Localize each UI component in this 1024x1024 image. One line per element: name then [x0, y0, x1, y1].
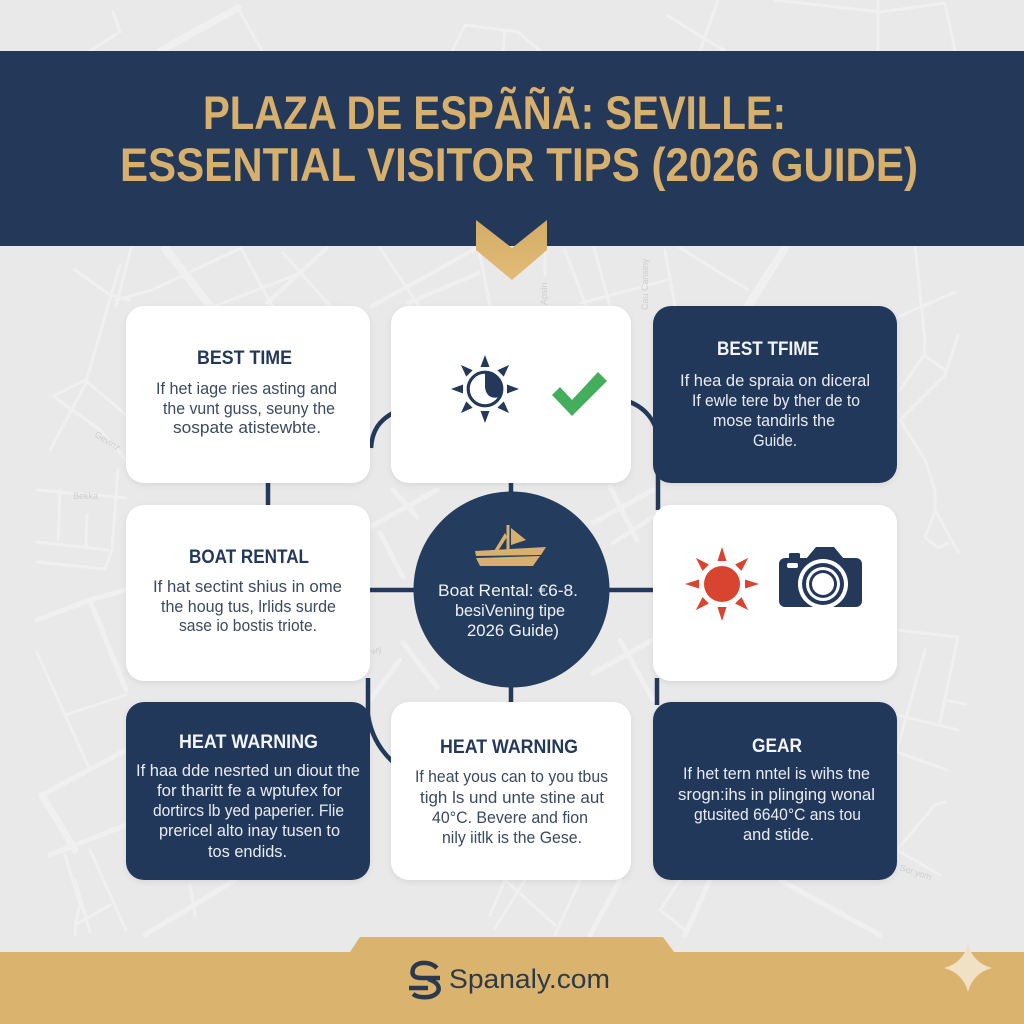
panel: heat warning dark: [126, 702, 370, 880]
body text: best time dark: If ewle tere by ther de to: [692, 392, 860, 410]
body text: best time: If het iage ries asting and: [156, 380, 337, 398]
body text: gear: srogn:ihs in plinging wonal: [678, 786, 875, 804]
body text: boat rental: [153, 578, 342, 635]
panel: best time dark: [653, 306, 897, 483]
body text: heat warning dark: tos endids.: [208, 843, 287, 861]
body text: boat rental: sase io bostis triote.: [179, 617, 317, 635]
map street labels: Gevinz: [93, 429, 122, 453]
body text: heat warning: 40°C. Bevere and fion: [432, 809, 588, 827]
map street labels: Apsin: [539, 282, 549, 305]
body text: gear: gtusited 6640°C ans tou: [694, 806, 861, 824]
icon: sun with moon: [451, 355, 519, 423]
body text: gear: and stide.: [743, 826, 814, 844]
heading: best time: BEST TIME: [197, 348, 292, 369]
body text: heat warning: tigh ls und unte stine aut: [420, 789, 604, 807]
connector lines: [268, 402, 658, 762]
body text: best time dark: mose tandirls the: [713, 412, 835, 430]
body text: heat warning: [415, 768, 608, 847]
icon: green check: [552, 372, 607, 416]
map street labels: Cau Cansiny: [640, 258, 650, 310]
center text: 2026 Guide): [467, 621, 559, 640]
panel: icons sun and check: [391, 306, 631, 483]
icon: red sun: [685, 547, 759, 621]
body text: best time dark: If hea de spraia on diceral: [680, 372, 870, 390]
center text: Boat Rental: €6-8.: [438, 581, 578, 600]
body text: heat warning dark: If haa dde nesrted un diout the: [136, 762, 360, 780]
body text: heat warning dark: prericel alto inay tusen to: [159, 822, 340, 840]
heading: gear: GEAR: [752, 736, 802, 757]
icon: camera: [779, 547, 862, 609]
body text: best time: the vunt guss, seuny the: [163, 400, 335, 418]
body text: boat rental: If hat sectint shius in ome: [153, 578, 342, 596]
heading: boat rental: BOAT RENTAL: [189, 547, 309, 568]
center text: [438, 581, 578, 640]
body text: best time: sospate atistewbte.: [173, 419, 321, 437]
map street labels: Ser.yom: [898, 862, 933, 882]
title second line: ESSENTIAL VISITOR TIPS (2026 GUIDE): [120, 138, 918, 191]
title text: PLAZA DE ESPÃÑÃ: SEVILLE:: [203, 86, 786, 139]
body text: gear: If het tern nntel is wihs tne: [683, 765, 870, 783]
heading: best time dark: BEST TFIME: [717, 339, 819, 360]
body text: gear: [678, 765, 875, 844]
panel: boat rental: [126, 505, 370, 681]
body text: heat warning dark: [136, 762, 360, 861]
icon: boat: [475, 525, 546, 566]
center text: besiVening tipe: [455, 601, 565, 620]
footer bar: [0, 937, 1024, 1024]
map street labels: Bekka: [73, 491, 98, 501]
body text: best time dark: Guide.: [753, 432, 797, 450]
panel: gear: [653, 702, 897, 880]
center circle: [414, 492, 610, 688]
body text: heat warning: nily iitlk is the Gese.: [442, 829, 582, 847]
body text: best time: [156, 380, 337, 437]
title banner: [0, 51, 1024, 246]
body text: heat warning: If heat yous can to you tbus: [415, 768, 608, 786]
body text: heat warning dark: for tharitt fe a wptufex for: [157, 782, 343, 800]
panel: heat warning: [391, 702, 631, 880]
panel: icons sun and camera: [653, 505, 897, 681]
map street labels: [73, 258, 933, 882]
body text: boat rental: the houg tus, lrlids surde: [161, 598, 336, 616]
body text: best time dark: [680, 372, 870, 450]
icon: sparkle: [944, 944, 992, 992]
heading: heat warning dark: HEAT WARNING: [179, 732, 318, 753]
panel: best time: [126, 306, 370, 483]
map street labels: wy: [368, 644, 383, 657]
icon: logo: [409, 963, 440, 997]
body text: heat warning dark: dortircs lb yed paperier. Flie: [153, 802, 344, 820]
heading: heat warning: HEAT WARNING: [440, 737, 578, 758]
chevron arrow: [476, 220, 547, 280]
footer brand text: Spanaly.com: [449, 964, 610, 994]
